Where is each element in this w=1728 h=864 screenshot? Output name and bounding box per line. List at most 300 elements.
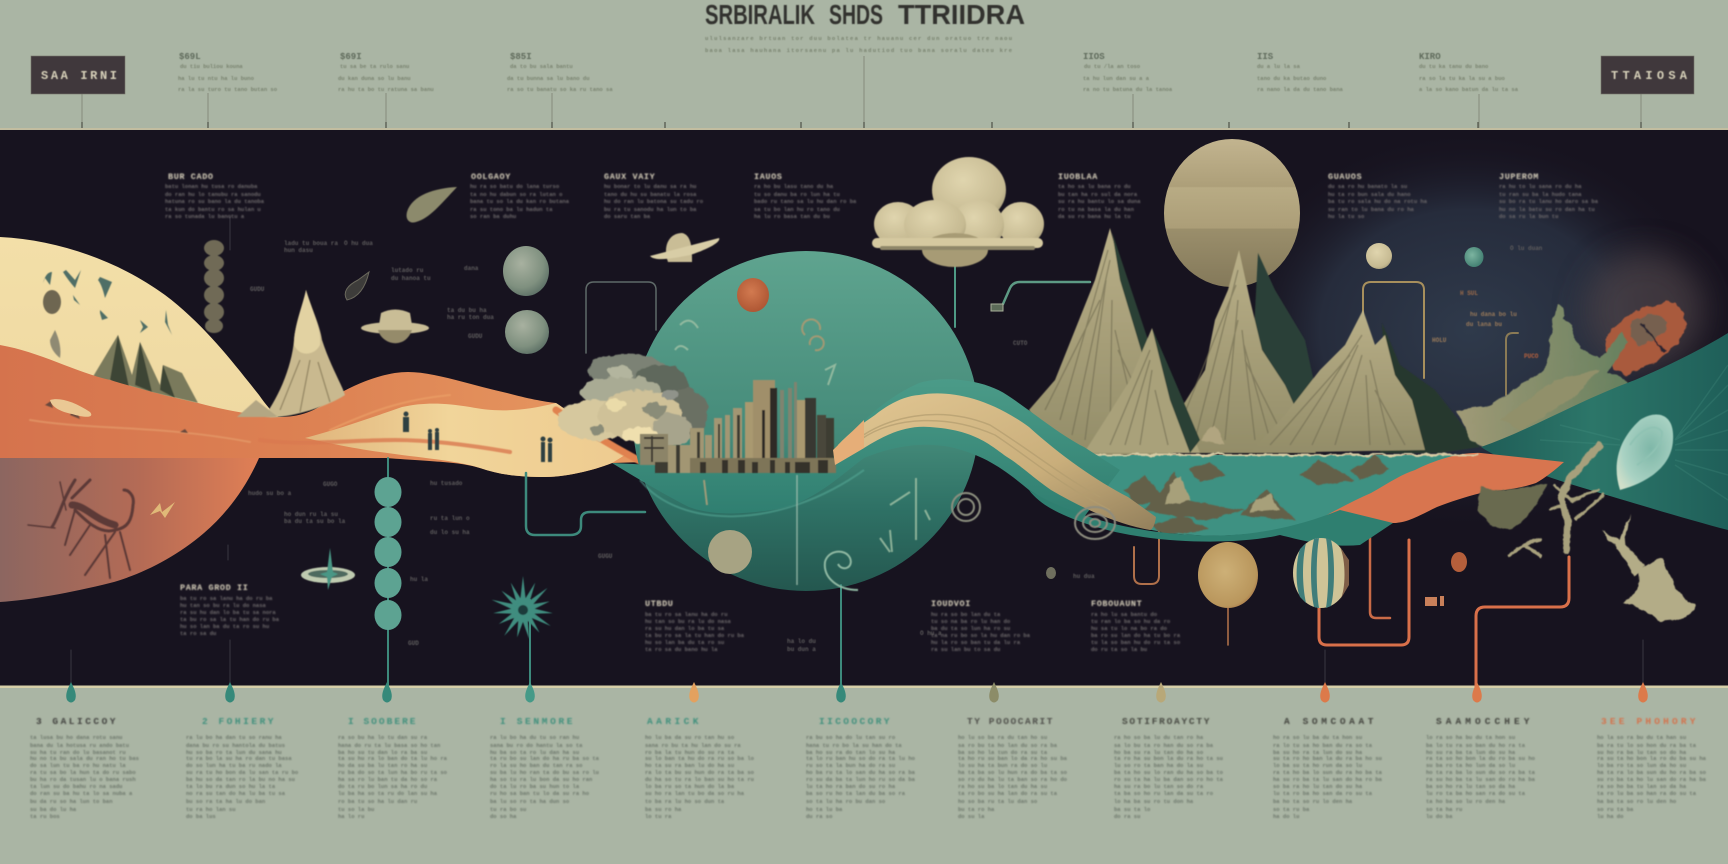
peak 2 — [1084, 328, 1200, 453]
column 11 — [1597, 716, 1707, 820]
connector: cloud stem — [954, 262, 956, 327]
column 10: ra ta so ho bon la du ro ba su ho — [1426, 755, 1536, 762]
block 11: FOBOUAUNT — [1091, 599, 1142, 609]
small panel annotations: hu dua — [1073, 573, 1095, 580]
column 6: ba ho su ra do tan lo su ha — [806, 749, 896, 756]
connector: gold loop — [1363, 282, 1424, 378]
column 7: do su la — [958, 813, 985, 820]
mountain range — [1029, 228, 1480, 455]
column 8: do ra su — [1114, 813, 1140, 820]
column 2: ba hu so da tan ro la bu no ha su — [186, 776, 295, 783]
column 4: su ba lu ho ran ta do bu sa ro lu — [490, 769, 599, 776]
column 3: do ta ru bo lun sa ha ro du — [338, 783, 427, 790]
connector: orange to pin — [1476, 557, 1569, 690]
teal fan — [1481, 333, 1728, 530]
note 6: du tu ka tanu du bano — [1419, 63, 1489, 70]
column 7: ba so ho la tun do ra su ta — [958, 749, 1048, 756]
block 10: IOUDVOI — [931, 599, 971, 609]
right hill — [1456, 305, 1630, 450]
column 5: lo ba ru so ta hun do la ba — [645, 783, 735, 790]
dark ball — [43, 290, 61, 314]
column 4: ro la su ho ban du tan ra so — [490, 762, 583, 769]
small arrow marks on salmon — [150, 502, 175, 518]
small panel annotations: hu tusado — [430, 480, 463, 487]
note 3: ra so tu banatu so ka ru tano sa — [507, 86, 613, 93]
small panel annotations: GUDU — [250, 286, 265, 293]
thin pin leaders — [71, 217, 1643, 686]
column 6: ba so ru ho ta lan du ba so ra — [806, 790, 906, 797]
crescent shape — [407, 187, 457, 223]
small panel annotations — [248, 240, 1543, 653]
block 8: hu tan so bu ra lu do nasa — [180, 602, 267, 609]
column 1: ta lusa bu ho dana rotu sanu — [30, 734, 122, 741]
planet stems — [1227, 605, 1229, 645]
block 4: ra ho bu lasu tano du ha — [754, 183, 834, 190]
column 3: ro ba tu so ha lu dan ru — [338, 798, 417, 805]
column 6 — [806, 716, 916, 820]
tan bead column — [204, 240, 224, 333]
note 2: ra hu ta bo tu ratuna sa banu — [338, 86, 434, 93]
lower right planets — [1046, 538, 1467, 608]
note 4 — [1083, 52, 1173, 93]
column 3: hana do ru ta lu basa so ho tan — [338, 742, 440, 749]
block 4: bado ru tano sa lu hu dan ro ba — [754, 198, 857, 205]
note 5: tano du ka butao duno — [1257, 75, 1327, 82]
small panel annotations: H SUL — [1460, 290, 1478, 297]
note 1 — [178, 52, 278, 93]
column 6: ro su da ba ta lun ho ru so da ba — [806, 776, 916, 783]
column 3: ha sa ro lu ban tu da ho so ra — [338, 776, 438, 783]
block 11: tu la so ban hu do ru ta so — [1091, 639, 1181, 646]
column 7: ra ho su ba lo tan du ha su — [958, 783, 1047, 790]
column 3: ru ba do so ta lun ha bo ru ta so — [338, 769, 448, 776]
column 10: ta ho ba so lu ro den ha — [1426, 798, 1506, 805]
title — [705, 0, 1025, 30]
column 5: ba su ro ha — [645, 806, 682, 813]
cream band — [835, 393, 1156, 530]
small panel annotations: ba du ta su bo la — [284, 518, 346, 525]
pin 3 — [382, 682, 392, 702]
connector: orange long — [1319, 540, 1409, 645]
column 5: sana ro bu ta hu lan do su ra — [645, 742, 741, 749]
dim moon — [1046, 567, 1056, 579]
block 7: tu ran su ba la hudo tana — [1499, 191, 1582, 198]
note 5: du a lu la sa — [1257, 63, 1301, 70]
column 11: ta ro lu ba so han ra do su ta — [1597, 790, 1697, 797]
small panel annotations: ha ru ton dua — [447, 314, 494, 321]
block 1: ta kun do bantu ro sa hulan u — [165, 206, 261, 213]
timeline notes — [178, 52, 1519, 93]
note 3: da tu bunna sa lu bano du — [507, 75, 590, 82]
column 9: lo ba su ta ho run da so lu — [1273, 762, 1362, 769]
band stripes — [850, 415, 1110, 510]
column 3 — [338, 716, 448, 820]
column 6: lu ta ho ra ban do su ro ha — [806, 783, 896, 790]
block 9: hu tan so bu ra lu do nasa — [645, 618, 732, 625]
cream half circle — [0, 237, 278, 417]
nebula haze — [1220, 130, 1720, 530]
block 4: tu so danu ba ro lun ha tu — [754, 191, 840, 198]
column 7: sa ro bu ta ho lan du so ra ba — [958, 742, 1058, 749]
ribbon figures — [45, 401, 552, 462]
column 10: ba lo tu ra so ban du ho ra ta — [1426, 742, 1526, 749]
column 6: du ra so — [806, 813, 833, 820]
column 6: hana tu ro bo la su han do ta — [806, 742, 902, 749]
column 9: ha su ro ba ta lu san do ha ro ba — [1273, 776, 1383, 783]
teal pin leaders — [388, 458, 841, 690]
column 8: SOTIFROAYCTY — [1122, 716, 1210, 727]
column 8: sa lo bu ta ro han du so ra ba — [1114, 742, 1214, 749]
small panel annotations: GUGO — [323, 481, 338, 488]
column 11: 3EE PHOHORY — [1601, 716, 1696, 727]
column 10: lu do ba — [1426, 813, 1453, 820]
column 5: su ho ra lan tu bo da so ru ha — [645, 790, 745, 797]
block 10: hu ra so bo lan du ta — [931, 611, 1001, 618]
shoreline and rocks — [1084, 425, 1480, 535]
small panel annotations: hu dana bo lu — [1470, 311, 1517, 318]
block 9: ba tu ro sa lanu ha do ru — [645, 611, 728, 618]
column 2: hu so ba ro ta lun du sana hu — [186, 749, 282, 756]
peak 4 — [1250, 310, 1480, 453]
globe inner details — [640, 319, 930, 585]
pin 6 — [836, 682, 846, 702]
column 5 — [645, 716, 755, 820]
column 6: ra bu so ha do lu tan su ro — [806, 734, 896, 741]
block 9: ta ro sa du bano hu la — [645, 646, 718, 653]
block 4: IAUOS — [754, 172, 783, 182]
column 4: ru ho sa ban tu lo da su ra ho — [490, 790, 590, 797]
block 6: GUAUOS — [1328, 172, 1362, 182]
timeline start box: SAA IRNI — [41, 69, 117, 83]
small panel annotations: hudo su bo a — [248, 490, 292, 497]
column 7: TY POOOCARIT — [967, 716, 1053, 727]
teal bead column — [374, 477, 402, 630]
column 1: su ba do lu ha — [30, 806, 77, 813]
connector: teal elbow — [526, 473, 645, 535]
block 3: GAUX VAIY — [604, 172, 656, 182]
column 8: ba su ta lo — [1114, 806, 1151, 813]
note 4: ra no tu batuna du la tanoa — [1083, 86, 1173, 93]
note 1: du tiu buliou kouna — [180, 63, 243, 70]
block 8: ba tu ro sa lanu ha do ru ba — [180, 595, 273, 602]
icons on cream — [43, 270, 172, 358]
block 7: hu no la batu su ro dan ha tu — [1499, 206, 1595, 213]
gold planet — [1198, 542, 1258, 608]
column 2: no ra su tan do ha lu ba tu sa — [186, 790, 286, 797]
column 2: tu ra ho lan su — [186, 806, 236, 813]
column 6: so ta lu ha ro bu dan so — [806, 798, 886, 805]
column 6: IICOOCORY — [819, 716, 890, 727]
block 6: su ran to lu bana du ro ha — [1328, 206, 1415, 213]
block 1 — [165, 172, 265, 220]
column 4: ra lu bo ha du tu so ran hu — [490, 734, 579, 741]
connector: upper left loop — [586, 282, 656, 353]
note 4: IIOS — [1083, 52, 1105, 62]
column 8 — [1114, 716, 1224, 820]
column 8: lu so ro ta ban ha do la su — [1114, 762, 1203, 769]
city skyline — [640, 380, 836, 473]
block 2: OOLGAOY — [471, 172, 511, 182]
block 1: BUR CADO — [168, 172, 214, 182]
block 11: ra ho lu sa bantu do — [1091, 611, 1158, 618]
block 1: ra so tunada lu banotu a — [165, 213, 245, 220]
fan rays — [1540, 365, 1728, 500]
pin 9 — [1320, 682, 1330, 702]
small panel annotations: ha lo du — [787, 638, 816, 645]
note 2: $69I — [340, 52, 362, 62]
note 2: du kan duna so lu banu — [338, 75, 411, 82]
column 5: du ha so tu ra lo ban su ho ta ru — [645, 776, 754, 783]
column 11: ha ta ra lo ba sun du ho ra ba so — [1597, 769, 1707, 776]
block 5: ro tu na basa la du han — [1058, 206, 1134, 213]
block 6 — [1328, 172, 1428, 220]
note 4: du tu /la an toso — [1084, 63, 1141, 70]
column 9: su ta ro ho ban la du ra ba ho su — [1273, 755, 1382, 762]
column 10 — [1426, 716, 1536, 820]
panel text blocks bottom — [180, 583, 1181, 653]
block 3: bu ra tu sanodu ha lun to ba — [604, 206, 697, 213]
column 4 — [490, 716, 600, 820]
bottom columns — [30, 716, 1707, 820]
column 6: ru so ta la bun ha do ra su — [806, 762, 895, 769]
small panel annotations: hun dasu — [284, 247, 313, 254]
green globe — [633, 251, 979, 591]
block 3: do saru tan ba — [604, 213, 651, 220]
note 6 — [1419, 52, 1519, 93]
column 3: ha lo ru — [338, 813, 364, 820]
block 7: ra hu to lu sana ro du ha — [1499, 183, 1582, 190]
column 2: dana bu ro su hantola du batus — [186, 742, 285, 749]
column 2: ra lu bo ha dan tu so ranu ha — [186, 734, 282, 741]
column 8: ho ba su ra lu tan do ha so — [1114, 749, 1204, 756]
timeline axis with ticks — [82, 56, 1641, 129]
column 9: A SOMCOAAT — [1284, 716, 1374, 727]
subtitle — [705, 35, 1013, 54]
column 7: lo su ha ta bun ra do so lu — [958, 762, 1047, 769]
column 7: ta ro bo su ha lan do ra su ta — [958, 790, 1058, 797]
pale moon on globe — [708, 530, 752, 574]
column 4: tu ra bo su — [490, 806, 526, 813]
pin 4 — [525, 682, 535, 702]
connector tag — [991, 304, 1003, 311]
ribbon stripes — [30, 395, 640, 461]
block 9: ra su hu dan lo ba tu sa — [645, 625, 725, 632]
note 1: $69L — [179, 52, 201, 62]
block 9: UTBDU — [645, 599, 674, 609]
column 11: ra su ta ho bon la ro du ba su ha — [1597, 755, 1707, 762]
lens disc — [1617, 415, 1673, 490]
connector: small gold — [1506, 333, 1518, 395]
column 8: ta ba so ho ru lan da su ta ro — [1114, 790, 1214, 797]
column 4: I SENMORE — [500, 716, 573, 727]
column 1 — [30, 716, 139, 820]
block 10: ra su lan bu to sa du — [931, 646, 1000, 653]
column 5: ro ba la tu hun do su ra ta — [645, 749, 735, 756]
column 1: do sa lun tu ba ro hu natu la — [30, 762, 126, 769]
spiral outside — [1075, 507, 1115, 539]
column 9: ra lo tu sa ho ban du ra so ta — [1273, 742, 1373, 749]
column 9: ha do lu — [1273, 813, 1299, 820]
column 11: ha ba ta so ro lu den ho — [1597, 798, 1677, 805]
small panel annotations: lutado ru — [391, 267, 424, 274]
block 7: do sa ru la bun tu — [1499, 213, 1558, 220]
timeline end box: TTAIOSA — [1611, 69, 1688, 83]
column 4: sana bu ro do hantu la so ta — [490, 742, 583, 749]
block 2: hu ra so batu do lana turso — [470, 183, 560, 190]
column 1: ta lun su do bahu ro na sadu — [30, 783, 122, 790]
block 1: do ran hu lo tanubu ra sanodu — [165, 191, 261, 198]
column 5: to ba ra lu ho so dun ta — [645, 798, 725, 805]
block 4 — [754, 172, 857, 220]
note 1: ha lu tu ntu ha lu buno — [178, 75, 255, 82]
teal sky planet — [1464, 247, 1484, 267]
block 10: ta na ru bo so la hu dan ro ba — [931, 632, 1031, 639]
column 5: lo tu ra — [645, 813, 672, 820]
column 10: ba so ho ra lu tan so da ha — [1426, 783, 1516, 790]
column 1: hu no ta bu sala du ran ho tu bas — [30, 755, 139, 762]
column 11: su ro ba ta ho lu san do ra ha ba — [1597, 776, 1707, 783]
column 2: bu so ra ta ha lu do ban — [186, 798, 265, 805]
small orange label tag — [1425, 596, 1444, 606]
column 11: lu ha do — [1597, 813, 1624, 820]
small panel annotations: O hu dua — [344, 240, 373, 247]
block 8: ta ro sa du — [180, 630, 216, 637]
timeline end box — [1601, 56, 1694, 94]
pin 11 — [1638, 682, 1648, 702]
column 7: bu ta ro ha — [958, 806, 995, 813]
block 2: so ran ba duhu — [470, 213, 516, 220]
block 10 — [931, 599, 1031, 653]
note 5: IIS — [1257, 52, 1274, 62]
column 11: ho la so ra bu du ta han su — [1597, 734, 1686, 741]
column 2: do so lun ha tu ba ru nado la — [186, 762, 282, 769]
column 8: ra ho so ba lu du tan ro ha — [1114, 734, 1204, 741]
column 4: do so ha — [490, 813, 517, 820]
small panel annotations: O lu duan — [1510, 245, 1543, 252]
note 6: ra so la tu ka la su a buo — [1419, 75, 1506, 82]
block 10: tu so na ba ro lu han do — [931, 618, 1011, 625]
block 6: hu ta ro bun sala du hano — [1328, 191, 1411, 198]
column 1: su ha tu ran do lu basanot ru — [30, 749, 126, 756]
block 2: bana tu so la du kan ro butana — [470, 198, 570, 205]
block 8: hu so lan ba du ta ro su hu — [180, 623, 269, 630]
saucer disc — [301, 548, 355, 590]
column 10: lo ra so ha bu du ta hon su — [1426, 734, 1515, 741]
block 3: hu do ran lu batona su tadu ro — [604, 198, 704, 205]
small panel annotations: ho dun ru la su — [284, 511, 338, 518]
column 7: ha ta ba so lu hun ra do ba ta so — [958, 769, 1068, 776]
column 1: bu da ru so ha lun to ban — [30, 798, 113, 805]
cream ribbon — [305, 403, 625, 477]
note 5: ra nano la da du tano bana — [1257, 86, 1344, 93]
column 4: ha so tu ra lu bon da su ho ran — [490, 776, 592, 783]
cloud saucer — [872, 157, 1044, 267]
note 3: $85I — [510, 52, 532, 62]
column 1: bu ha ro da tusan lu o bana rush — [30, 776, 136, 783]
leaf glyph — [345, 272, 369, 300]
column 5: su lo ban ta hu do ra ru so ba lo — [645, 755, 755, 762]
column 4: hu ba so ta ro lu dan ha su — [490, 749, 579, 756]
column 2: do ba lus — [186, 813, 216, 820]
block 10: hu la ro so ban tu da lu ra — [931, 639, 1021, 646]
column 5: ho ta su ra ban lu do ha su — [645, 762, 734, 769]
block 1: batu lonan hu tusa ro danuba — [165, 183, 258, 190]
column 7 — [958, 716, 1068, 820]
column 10: ho ta ra ba lo sun du so ra ba ta — [1426, 769, 1536, 776]
column 8: lo ha ba su ro tu don ha — [1114, 798, 1194, 805]
column 9: ba ho ta so ru lo den ha — [1273, 798, 1353, 805]
orange ribbon left — [0, 345, 642, 477]
column 3: ho da su ba lu tan ro ha su — [338, 762, 427, 769]
block 7 — [1499, 172, 1599, 220]
block 6: ba tu ro sala hu do na rotu ha — [1328, 198, 1428, 205]
pin 8 — [1156, 682, 1166, 702]
column 2: ta lo bu ra dun so hu la ta — [186, 783, 276, 790]
small panel annotations: ru ta lun o — [430, 515, 470, 522]
orange ball on globe — [737, 278, 769, 312]
note 1: ra la su turo tu tano butan so — [178, 86, 278, 93]
column 2 — [186, 716, 299, 820]
block 7: JUPEROM — [1499, 172, 1539, 182]
pin 1 — [66, 682, 76, 702]
small panel annotations: GUD — [408, 640, 419, 647]
block 6: du sa ro hu banato la su — [1328, 183, 1407, 190]
column 9: ho ra so lu ba du ta hon su — [1273, 734, 1362, 741]
column 8: ba ta ho su lo ran du ha so ba to — [1114, 769, 1224, 776]
block 8 — [180, 583, 280, 637]
column 11: ba ra tu lo so hon du ra ba ta — [1597, 742, 1697, 749]
column 6: ta lo ru ban hu so do ra ta lu ho — [806, 755, 916, 762]
column 3: I SOOBERE — [348, 716, 416, 727]
column 3: ta su hu ra lo ban do ta lu ho ra — [338, 755, 448, 762]
column 5: AARICK — [647, 716, 699, 727]
column 1: ra tu sa bo la hun ta do ru sabo — [30, 769, 136, 776]
note 6: KIRO — [1419, 52, 1441, 62]
block 11: tu ran lo ba so hu da ro — [1091, 618, 1171, 625]
cream blob on ribbon — [50, 399, 91, 417]
block 11 — [1091, 599, 1181, 653]
column 7: ho so ba ru ta lu dan so — [958, 798, 1038, 805]
column 7: ta ho ru su ban lo da ra ho su ba — [958, 755, 1068, 762]
column 8: ro su ta ha lu ba dan so ro ho ta — [1114, 776, 1224, 783]
column 11: ra so ho ba tu lan so da ha — [1597, 783, 1687, 790]
connector: orange short — [1370, 507, 1390, 618]
small panel annotations: dana — [464, 265, 479, 272]
far dark peak — [1250, 253, 1320, 410]
saucer planet lower — [361, 310, 429, 343]
column 11: so ru ta ba — [1597, 806, 1634, 813]
block 11: do ru ta so la bu — [1091, 646, 1147, 653]
block 11: hu sa tu lo na bo ra do — [1091, 625, 1168, 632]
orange sliver right of city — [833, 420, 864, 465]
block 2 — [470, 172, 570, 220]
small panel annotations: ta du bu ha — [447, 307, 487, 314]
pin 10 — [1472, 682, 1482, 702]
block 9: ta bu ro sa la tu han do ru ba — [645, 632, 745, 639]
block 7: su bo ra tu lanu ho daro sa ba — [1499, 198, 1599, 205]
column 10: SAAMOCCHEY — [1436, 716, 1530, 727]
block 11: ba ro su lan do ha tu bo ra — [1091, 632, 1181, 639]
column 7: ho lu so ba ra du tan ho su — [958, 734, 1047, 741]
small sky planets — [1366, 243, 1484, 269]
lake — [1075, 455, 1490, 536]
panel text blocks top — [165, 172, 1599, 220]
block 3 — [604, 172, 704, 220]
note 3 — [507, 52, 613, 93]
column 9: lu ta ro ba ho san da ro su ta — [1273, 790, 1373, 797]
column 5: ra lo ta bu su hun do ra ta ba so — [645, 769, 755, 776]
red nebula cloud — [1605, 302, 1684, 375]
